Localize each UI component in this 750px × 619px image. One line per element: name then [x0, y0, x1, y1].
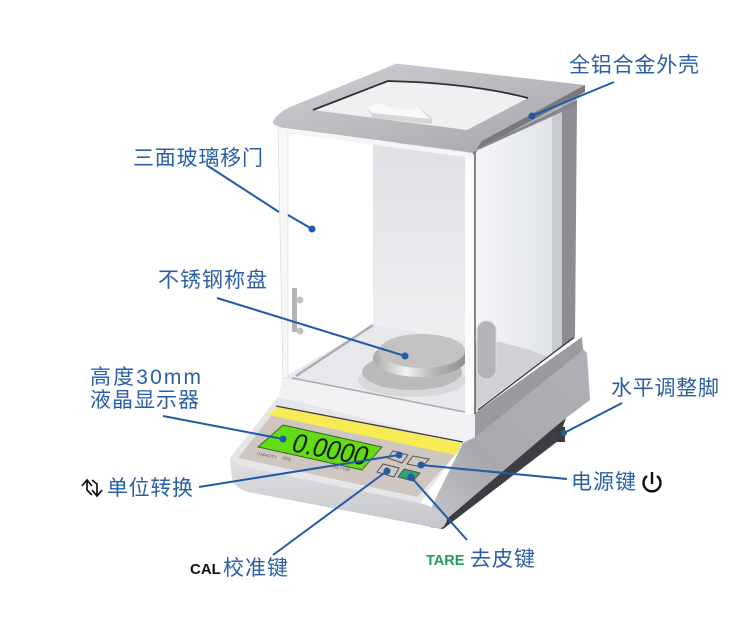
LCD reading: 0.0000 [288, 427, 374, 471]
callout: levelling foot [561, 377, 719, 436]
button: power [407, 456, 429, 467]
callout: LCD [90, 366, 286, 442]
callout: stainless pan [158, 269, 408, 360]
icon: switch arrows [82, 480, 102, 496]
door handle left [292, 288, 304, 334]
button: unit [388, 451, 408, 463]
control console: CAPACITY [257, 451, 277, 460]
right column [552, 100, 577, 354]
lid handle [367, 103, 432, 124]
callout: aluminium shell: 全铝合金外壳 [569, 54, 699, 77]
base right face [430, 349, 590, 524]
lid [273, 64, 585, 158]
callout: TARE key [408, 474, 535, 571]
callout: levelling foot: 水平调整脚 [611, 377, 719, 400]
callout: TARE key: TARE [426, 553, 465, 569]
front post [465, 148, 475, 414]
callout: CAL key: CAL [190, 561, 221, 578]
icon: power [644, 472, 660, 491]
callout: LCD: 液晶显示器 [90, 389, 199, 412]
callout: power key [418, 462, 660, 494]
button: TARE [398, 469, 420, 481]
yellow strip [268, 407, 462, 455]
control console [230, 397, 463, 528]
callout: CAL key: 校准键 [223, 557, 288, 580]
LCD display [258, 425, 382, 470]
callout: TARE key: 去皮键 [470, 548, 535, 571]
callout: sliding glass doors [133, 147, 316, 232]
base right rail [475, 337, 583, 437]
callout: aluminium shell [528, 54, 699, 120]
callout: LCD: 高度30mm [90, 366, 201, 389]
callout: stainless pan: 不锈钢称盘 [158, 269, 267, 292]
callout: unit switch: 单位转换 [107, 477, 193, 500]
glass chamber floor [283, 325, 547, 413]
button: CAL [377, 464, 399, 477]
foot [557, 427, 565, 442]
back panel [373, 143, 466, 358]
right glass panel [475, 112, 552, 412]
callout: CAL key [190, 468, 390, 580]
door handle right [477, 321, 496, 379]
control console: RS TYPE [333, 464, 351, 472]
callout: sliding glass doors: 三面玻璃移门 [133, 147, 263, 170]
weighing pan [358, 334, 467, 397]
control console: 200g [282, 455, 292, 462]
front deck [278, 378, 475, 443]
balance illustration [230, 64, 590, 529]
left post [278, 128, 288, 378]
callout: unit switch [82, 452, 402, 500]
base shadow strip [430, 418, 566, 529]
callout: power key: 电源键 [571, 471, 636, 494]
